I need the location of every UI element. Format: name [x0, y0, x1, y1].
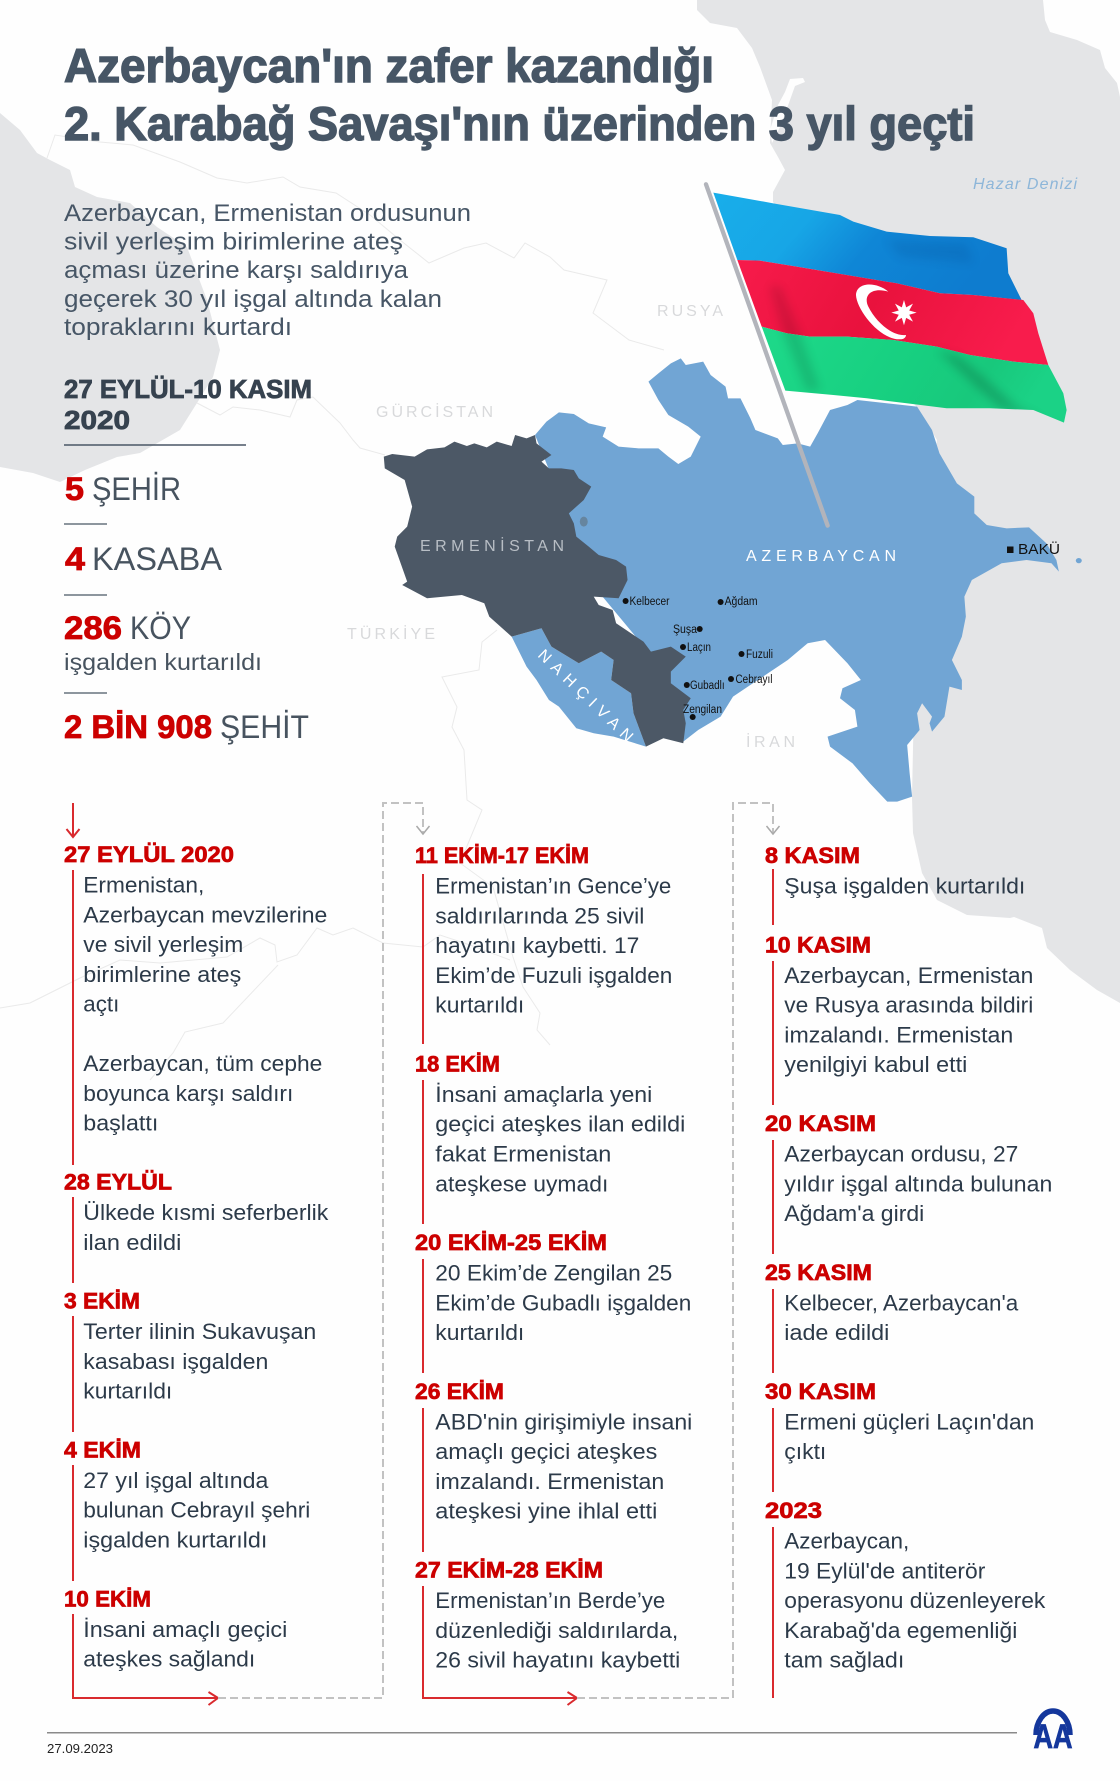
Nakhchivan	[512, 628, 646, 747]
entry: 25 Kasım: iade edildi	[784, 1320, 889, 1345]
entry: 10 Ekim: İnsani amaçlı geçici	[83, 1617, 287, 1642]
entry: 2023: operasyonu düzenleyerek	[784, 1588, 1046, 1613]
title	[64, 39, 975, 150]
entry: 4 Ekim: 4 EKİM	[64, 1437, 141, 1462]
entry: 11-17 Ekim: kurtarıldı	[435, 993, 524, 1018]
stat: 5 cities: ŞEHİR	[92, 471, 181, 507]
entry: 27 Eylül 2020: birimlerine ateş	[83, 962, 241, 987]
entry: 26 Ekim: ABD'nin girişimiyle insani	[435, 1409, 692, 1434]
title: 2. Karabağ Savaşı'nın üzerinden 3 yıl geçti	[64, 97, 975, 150]
entry: 10 Kasım: imzalandı. Ermenistan	[784, 1022, 1013, 1047]
red stripe	[737, 260, 1048, 365]
entry: 27 Eylül 2020: Azerbaycan mevzilerine	[83, 902, 327, 927]
entry: 18 Ekim: geçici ateşkes ilan edildi	[435, 1112, 685, 1137]
entry: 2023: tam sağladı	[784, 1648, 904, 1673]
entry: 10 Ekim: ateşkes sağlandı	[83, 1647, 255, 1672]
city: Zengilan	[683, 704, 722, 720]
entry: 20-25 Ekim: Ekim’de Gubadlı işgalden	[435, 1290, 691, 1315]
entry: 27 Eylül 2020: ve sivil yerleşim	[83, 932, 243, 957]
entry: 4 Ekim: 27 yıl işgal altında	[83, 1468, 269, 1493]
date heading: 27 EYLÜL-10 KASIM	[64, 374, 312, 404]
dashed connector from column 1 to column 2	[218, 803, 430, 1698]
start arrow	[66, 803, 80, 837]
entry: 11-17 Ekim: 11 EKİM-17 EKİM	[415, 843, 589, 868]
entry: 27-28 Ekim: 27 EKİM-28 EKİM	[415, 1558, 603, 1582]
entry: 18 Ekim: İnsani amaçlarla yeni	[435, 1082, 652, 1107]
entry: 20-25 Ekim: 20 Ekim’de Zengilan 25	[435, 1261, 672, 1286]
entry: 18 Ekim	[415, 1051, 685, 1224]
dashed connector from column 2 to column 3	[577, 803, 780, 1698]
entry: 20 Kasım: 20 KASIM	[765, 1111, 876, 1136]
label: Ermenistan: ERMENİSTAN	[420, 536, 564, 555]
entry: 4 Ekim: işgalden kurtarıldı	[83, 1527, 267, 1552]
date stamp: 27.09.2023	[47, 1742, 113, 1756]
intro paragraph: sivil yerleşim birimlerine ateş	[64, 228, 403, 256]
entry: 4 Ekim	[64, 1437, 310, 1581]
stat: 2908 martyrs	[64, 709, 309, 745]
entry: 10 Ekim: 10 EKİM	[64, 1586, 151, 1611]
entry: 20-25 Ekim	[415, 1230, 691, 1373]
entry: 18 Ekim: ateşkese uymadı	[435, 1171, 608, 1196]
entry: 11-17 Ekim: hayatını kaybetti. 17	[435, 933, 639, 958]
entry: 26 Ekim: amaçlı geçici ateşkes	[435, 1439, 657, 1464]
entry: 20-25 Ekim: 20 EKİM-25 EKİM	[415, 1230, 607, 1255]
entry: 2023: Azerbaycan,	[784, 1528, 909, 1553]
city: Kelbecer: Kelbecer	[630, 596, 670, 608]
entry: 10 Kasım	[765, 932, 1033, 1105]
flag fold shading	[770, 240, 1047, 420]
label: Rusya: RUSYA	[657, 303, 723, 320]
crescent	[856, 285, 906, 339]
label: Azerbaycan: AZERBAYCAN	[746, 548, 896, 565]
entry: 11-17 Ekim: Ermenistan’ın Gence’ye	[435, 874, 671, 899]
entry: 3 Ekim: Terter ilinin Sukavuşan	[83, 1319, 316, 1344]
background: seas	[0, 0, 1120, 1003]
stat: 2908 martyrs: 2 BİN 908	[64, 709, 212, 745]
stat: 4 towns: KASABA	[92, 541, 223, 577]
entry: 30 Kasım	[765, 1379, 1034, 1492]
city: Laçın: Laçın	[687, 642, 711, 654]
entry: 27 Eylül 2020: başlattı	[83, 1111, 158, 1136]
stat: 4 towns: 4	[65, 541, 85, 577]
entry: 3 Ekim: 3 EKİM	[64, 1289, 140, 1314]
entry: 25 Kasım: 25 KASIM	[765, 1260, 872, 1285]
entry: 28 Eylül	[64, 1170, 329, 1283]
island near Baku	[1076, 558, 1082, 563]
city: Cebrayıl: Cebrayıl	[736, 674, 772, 686]
entry: 26 Ekim: ateşkesi yine ihlal etti	[435, 1499, 657, 1524]
entry: 20 Kasım: Ağdam'a girdi	[784, 1201, 924, 1226]
entry: 26 Ekim: 26 EKİM	[415, 1379, 504, 1404]
entry: 28 Eylül: 28 EYLÜL	[64, 1170, 172, 1194]
city: Fuzuli: Fuzuli	[746, 649, 773, 661]
city: Gubadlı: Gubadlı	[690, 680, 725, 692]
Caspian Sea	[697, 0, 1120, 1003]
intro paragraph: Azerbaycan, Ermenistan ordusunun	[64, 200, 471, 227]
logo: Anadolu Agency	[1034, 1711, 1072, 1756]
Azerbaijan	[535, 358, 1059, 802]
stat: 286 villages: işgalden kurtarıldı	[64, 649, 262, 675]
date heading	[64, 374, 312, 435]
entry: 26 Ekim: imzalandı. Ermenistan	[435, 1469, 664, 1494]
entry: 10 Kasım: Azerbaycan, Ermenistan	[784, 963, 1033, 988]
entry: 11-17 Ekim: Ekim’de Fuzuli işgalden	[435, 963, 672, 988]
stat: 5 cities: 5	[65, 471, 84, 507]
Black Sea	[0, 113, 220, 482]
city: Ağdam: Ağdam	[725, 596, 758, 608]
city: Laçın	[680, 642, 711, 654]
logo: Anadolu Agency: AA	[1034, 1718, 1072, 1756]
eight-pointed star	[891, 300, 917, 325]
city: Şuşa: Şuşa	[673, 624, 698, 636]
map of Azerbaijan and Armenia	[384, 358, 1082, 802]
entry: 2023: 2023	[765, 1498, 822, 1523]
stat: 2908 martyrs: ŞEHİT	[220, 709, 309, 745]
entry: 8 Kasım: Şuşa işgalden kurtarıldı	[784, 874, 1025, 899]
flag of Azerbaijan	[706, 184, 1067, 526]
intro paragraph: açması üzerine karşı saldırıya	[64, 257, 409, 284]
country border lines	[0, 135, 664, 1080]
entry: 27 Eylül 2020: açtı	[83, 992, 119, 1017]
entry: 10 Kasım: 10 KASIM	[765, 932, 871, 957]
entry: 30 Kasım: Ermeni güçleri Laçın'dan	[784, 1409, 1034, 1434]
entry: 8 Kasım	[765, 843, 1025, 925]
city: Bakü: BAKÜ	[1018, 540, 1060, 558]
timeline column 3	[765, 843, 1052, 1698]
entry: 27-28 Ekim: Ermenistan’ın Berde’ye	[435, 1588, 665, 1613]
entry: 3 Ekim: kurtarıldı	[83, 1379, 172, 1404]
entry: 3 Ekim: kasabası işgalden	[83, 1349, 268, 1374]
entry: 4 Ekim: bulunan Cebrayıl şehri	[83, 1498, 310, 1523]
label: Türkiye: TÜRKİYE	[347, 624, 435, 643]
entry: 27 Eylül 2020: boyunca karşı saldırı	[83, 1081, 293, 1106]
entry: 2023: Karabağ'da egemenliği	[784, 1618, 1017, 1643]
label: Gürcistan: GÜRCİSTAN	[376, 402, 493, 421]
city: Zengilan: Zengilan	[683, 704, 722, 716]
inlet on the Caspian coast	[770, 78, 805, 143]
entry: 27-28 Ekim	[415, 1558, 680, 1705]
entry: 30 Kasım: 30 KASIM	[765, 1379, 876, 1404]
entry: 3 Ekim	[64, 1289, 316, 1432]
entry: 11-17 Ekim: saldırılarında 25 sivil	[435, 903, 644, 928]
entry: 27 Eylül 2020: 27 EYLÜL 2020	[64, 842, 234, 867]
entry: 8 Kasım: 8 KASIM	[765, 843, 860, 868]
entry: 30 Kasım: çıktı	[784, 1439, 826, 1464]
entry: 2023: 19 Eylül'de antiterör	[784, 1558, 985, 1583]
entry: 25 Kasım	[765, 1260, 1019, 1373]
stat: 286 villages: KÖY	[130, 610, 191, 646]
timeline column 2	[415, 843, 692, 1705]
map labels	[347, 176, 1077, 751]
stat: 286 villages: 286	[64, 610, 122, 646]
intro paragraph: geçerek 30 yıl işgal altında kalan	[64, 286, 442, 313]
entry: 10 Ekim	[64, 1586, 287, 1705]
entry: 27-28 Ekim: 26 sivil hayatını kaybetti	[435, 1648, 680, 1673]
entry: 20 Kasım: Azerbaycan ordusu, 27	[784, 1141, 1018, 1166]
entry: 26 Ekim	[415, 1379, 692, 1552]
entry: 27 Eylül 2020: Ermenistan,	[83, 873, 204, 898]
entry: 28 Eylül: Ülkede kısmi seferberlik	[83, 1200, 329, 1225]
entry: 20-25 Ekim: kurtarıldı	[435, 1320, 524, 1345]
date heading: 2020	[64, 405, 130, 435]
entry: 10 Kasım: ve Rusya arasında bildiri	[784, 993, 1033, 1018]
entry: 11-17 Ekim	[415, 843, 672, 1044]
entry: 25 Kasım: Kelbecer, Azerbaycan'a	[784, 1290, 1019, 1315]
entry: 18 Ekim: 18 EKİM	[415, 1051, 500, 1076]
intro paragraph: topraklarını kurtardı	[64, 314, 292, 341]
timeline column 1	[64, 803, 329, 1705]
entry: 27-28 Ekim: düzenlediği saldırılarda,	[435, 1618, 678, 1643]
label: Nahçıvan: NAHÇIVAN	[534, 647, 636, 746]
entry: 2023	[765, 1498, 1046, 1698]
entry: 10 Kasım: yenilgiyi kabul etti	[784, 1052, 967, 1077]
label: İran: İRAN	[746, 732, 795, 751]
flag pole	[706, 184, 828, 526]
Armenia	[384, 435, 691, 747]
stat: 286 villages	[64, 610, 262, 675]
entry: 20 Kasım: yıldır işgal altında bulunan	[784, 1171, 1052, 1196]
entry: 18 Ekim: fakat Ermenistan	[435, 1141, 611, 1166]
intro paragraph	[64, 200, 471, 341]
statistics panel	[64, 471, 309, 745]
title: Azerbaycan'ın zafer kazandığı	[64, 39, 714, 92]
entry: 27 Eylül 2020	[64, 842, 327, 1165]
entry: 20 Kasım	[765, 1111, 1052, 1254]
entry: 28 Eylül: ilan edildi	[83, 1230, 181, 1255]
blue stripe	[713, 193, 1022, 300]
green stripe	[762, 327, 1067, 423]
Lake Sevan	[580, 517, 588, 527]
entry: 27 Eylül 2020: Azerbaycan, tüm cephe	[83, 1051, 322, 1076]
label: Hazar Denizi: Hazar Denizi	[973, 176, 1077, 193]
